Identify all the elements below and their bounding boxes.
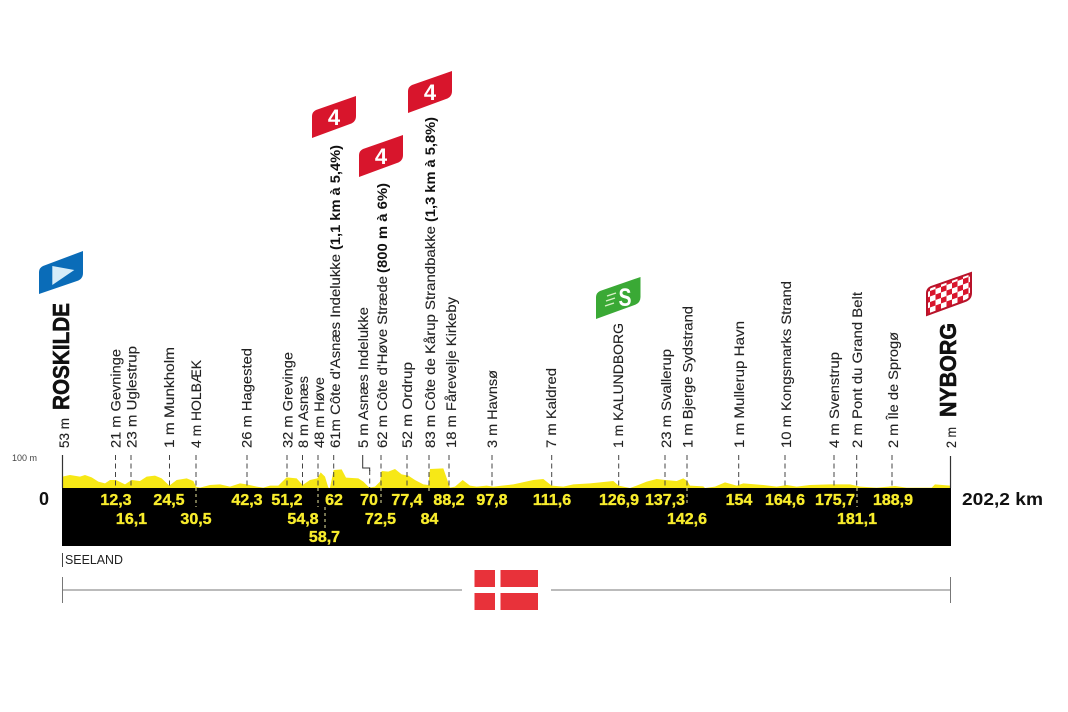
location labels: 48 m Høve <box>312 377 327 448</box>
distance markers in km: 54,8 <box>287 511 319 528</box>
location labels: 1 m Munkholm <box>162 347 177 448</box>
location labels: 61m Côte d'Asnæs Indelukke <box>328 254 343 448</box>
location labels: 21 m Gevninge <box>108 349 124 448</box>
icon: finish checkered flag <box>927 273 971 315</box>
icon: climb category 4 flag, Høve Stræde <box>359 135 403 177</box>
location labels: 23 m Uglestrup <box>124 346 140 448</box>
distance markers in km: 16,1 <box>116 511 147 528</box>
start town: Roskilde: 53 m <box>57 418 72 448</box>
icon: climb category 4 flag, Kårup Strandbakke: 4 <box>424 80 437 105</box>
location labels: 8 m Asnæs <box>296 376 311 448</box>
distance markers in km: 30,5 <box>180 511 212 528</box>
location labels: 1 m Bjerge Sydstrand <box>680 306 696 448</box>
location labels: 26 m Hagested <box>240 348 254 448</box>
icon: start flag blue <box>39 251 83 294</box>
dashed location markers <box>116 455 892 530</box>
start town: Roskilde <box>48 303 74 448</box>
icon: climb category 4 flag, Høve Stræde: 4 <box>375 144 388 169</box>
distance markers in km: 51,2 <box>271 492 303 509</box>
distance markers in km: 188,9 <box>873 492 913 509</box>
label: 100 m scale: 100 m <box>12 453 37 463</box>
distance markers in km: 58,7 <box>309 529 340 546</box>
profile axis lines <box>62 455 950 488</box>
chart: yellow elevation profile <box>62 468 950 488</box>
location labels: 1 m KALUNDBORG <box>611 323 626 448</box>
location labels: 4 m HOLBÆK <box>189 359 204 448</box>
location labels: 1 m Mullerup Havn <box>732 321 747 448</box>
icon: flag of Denmark <box>474 570 538 610</box>
black distance band <box>62 488 951 546</box>
finish town: Nyborg: NYBORG <box>935 323 961 417</box>
location labels: 83 m Côte de Kårup Strandbakke <box>423 226 438 448</box>
location labels: 4 m Svenstrup <box>827 352 842 448</box>
location labels: 2 m Pont du Grand Belt <box>850 292 865 448</box>
region label: Seeland: SEELAND <box>65 553 123 567</box>
distance markers in km: 12,3 <box>100 492 132 509</box>
distance markers in km: 88,2 <box>433 492 465 509</box>
icon: climb category 4 flag, Kårup Strandbakke <box>408 71 452 113</box>
distance markers in km: 164,6 <box>765 492 805 509</box>
location labels <box>108 117 901 448</box>
distance markers in km: 126,9 <box>599 492 639 509</box>
distance markers in km: 72,5 <box>365 511 396 528</box>
location labels: 18 m Fårevelje Kirkeby <box>444 297 459 448</box>
distance markers in km: 175,7 <box>815 492 855 509</box>
distance markers in km: 97,8 <box>476 492 508 509</box>
distance markers in km: 154 <box>726 492 752 509</box>
start distance zero: 0 <box>39 489 49 509</box>
location labels: (800 m à 6%) <box>375 183 390 273</box>
location labels: 52 m Ordrup <box>400 362 415 448</box>
location labels: 5 m Asnæs Indelukke <box>356 307 371 448</box>
location labels: 10 m Kongsmarks Strand <box>779 281 794 448</box>
country span line <box>62 577 950 603</box>
distance markers in km: 137,3 <box>645 492 685 509</box>
distance markers in km: 24,5 <box>153 492 185 509</box>
finish town: Nyborg: 2 m <box>944 427 959 448</box>
distance markers in km: 84 <box>421 511 438 528</box>
distance markers in km: 77,4 <box>391 492 423 509</box>
location labels: 23 m Svallerup <box>659 349 674 448</box>
location labels: (1,1 km à 5,4%) <box>328 145 343 250</box>
location labels: 3 m Havnsø <box>485 369 500 448</box>
location labels: (1,3 km à 5,8%) <box>423 117 438 222</box>
icon: climb category 4 flag, Asnæs Indelukke: 4 <box>328 105 341 130</box>
location labels: 32 m Grevinge <box>280 352 296 448</box>
total distance: 202,2 km <box>962 489 1043 509</box>
location labels: 2 m Île de Sprogø <box>885 331 901 448</box>
distance markers in km: 111,6 <box>533 492 571 509</box>
start town: Roskilde: ROSKILDE <box>48 303 74 410</box>
distance markers in km: 142,6 <box>667 511 707 528</box>
distance markers in km: 62 <box>325 492 343 509</box>
location labels: 7 m Kaldred <box>544 368 559 448</box>
distance markers in km: 181,1 <box>837 511 877 528</box>
icon: climb category 4 flag, Asnæs Indelukke <box>312 96 356 138</box>
icon: sprint flag green: S <box>618 284 632 312</box>
icon: sprint flag green <box>596 277 640 319</box>
distance markers in km: 42,3 <box>231 492 263 509</box>
distance markers in km: 70 <box>360 492 378 509</box>
distance markers in km <box>100 492 913 546</box>
location labels: 62 m Côte d'Høve Stræde <box>375 276 390 448</box>
